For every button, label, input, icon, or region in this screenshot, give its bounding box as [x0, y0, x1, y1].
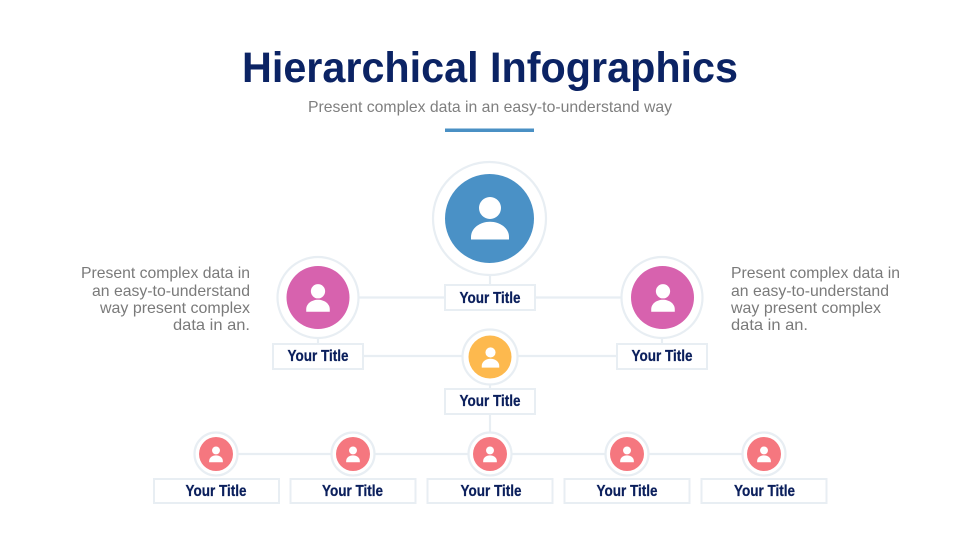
right node: pink person	[622, 257, 702, 338]
bottom title box 5: Your Title	[734, 483, 795, 500]
bottom node 5	[742, 432, 786, 476]
middle title box: Your Title	[460, 393, 521, 410]
middle node: yellow person	[462, 330, 518, 384]
title: Hierarchical Infographics	[242, 44, 738, 92]
top node: blue person	[433, 162, 546, 275]
bottom title box 1: Your Title	[186, 483, 247, 500]
right description: Present complex data in	[731, 265, 900, 282]
left title box: Your Title	[288, 348, 349, 365]
bottom title box 1	[154, 479, 279, 503]
bottom node 4	[606, 432, 648, 476]
bottom node 1	[194, 432, 238, 476]
bottom title box 4	[564, 479, 690, 503]
bottom node 2	[332, 432, 374, 476]
left description	[81, 265, 250, 334]
right title box	[617, 344, 707, 369]
bottom title box 3: Your Title	[460, 483, 522, 500]
right description: data in an.	[731, 317, 808, 334]
bottom title box 4: Your Title	[596, 483, 658, 500]
right description	[730, 265, 900, 334]
bottom title box 3	[428, 479, 552, 503]
title underline	[445, 128, 534, 132]
left description: way present complex	[99, 300, 250, 317]
bottom title box 2: Your Title	[322, 483, 383, 500]
left description: Present complex data in	[81, 265, 250, 282]
right description: way present complex	[730, 300, 881, 317]
subtitle: Present complex data in an easy-to-understand way	[308, 99, 672, 116]
bottom title box 2	[290, 479, 416, 503]
left node: pink person	[278, 257, 358, 338]
right title box: Your Title	[632, 348, 693, 365]
left description: data in an.	[173, 317, 250, 334]
left description: an easy-to-understand	[92, 283, 250, 300]
right description: an easy-to-understand	[731, 283, 889, 300]
bottom title box 5	[702, 479, 826, 503]
left title box	[273, 344, 363, 369]
middle title box	[445, 389, 535, 414]
top title box: Your Title	[460, 290, 521, 307]
bottom node 3	[468, 432, 512, 476]
top title box	[445, 285, 535, 310]
